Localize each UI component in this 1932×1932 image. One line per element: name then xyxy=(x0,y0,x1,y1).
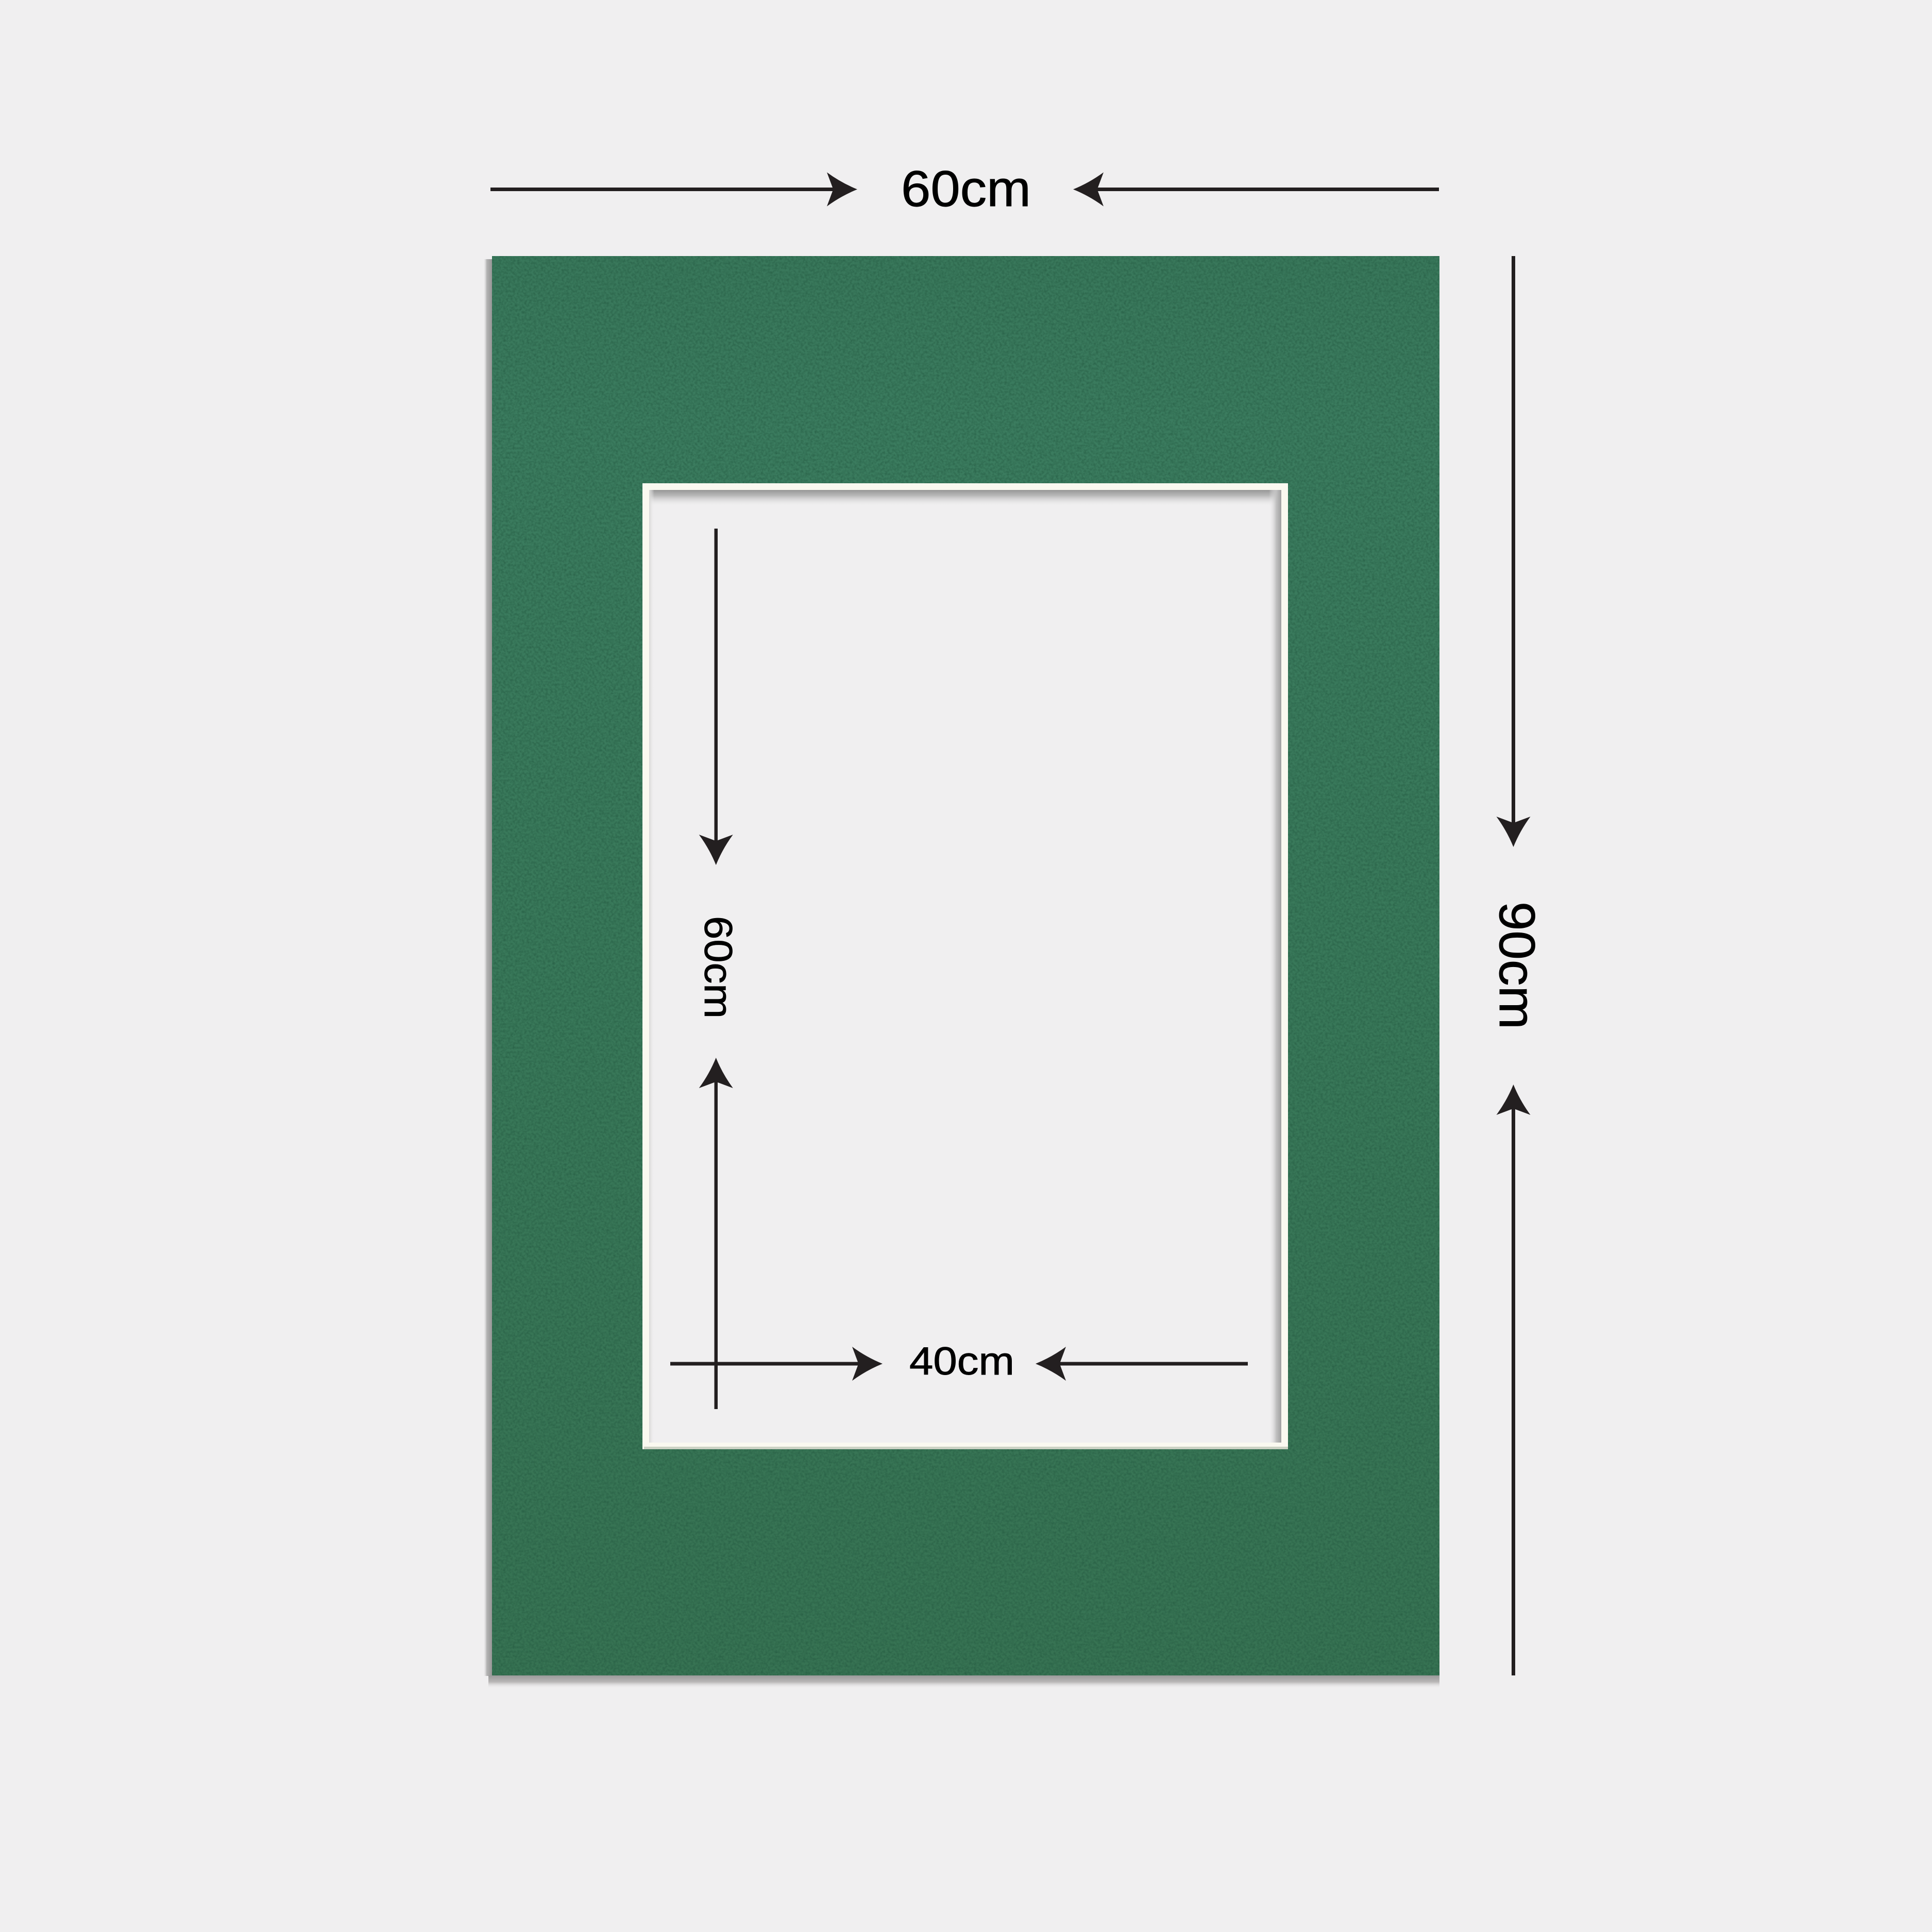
mat surface xyxy=(492,256,1439,1675)
panel: green mat board xyxy=(483,256,1439,1688)
arrow: outer height, top xyxy=(1496,256,1530,847)
inner shadow left xyxy=(649,490,654,1443)
inner shadow right xyxy=(1269,490,1281,1443)
window opening xyxy=(642,483,1288,1449)
text: window width label: 40cm xyxy=(909,1340,1014,1383)
bevel bottom edge xyxy=(644,1447,1288,1449)
heading: outer width label: 60cm xyxy=(901,160,1031,217)
text: window height label: 60cm xyxy=(696,916,740,1019)
cream bevel xyxy=(642,483,1288,1449)
opening interior xyxy=(649,490,1281,1443)
arrow: window width, left xyxy=(670,1347,883,1381)
arrow: window width, right xyxy=(1036,1347,1248,1381)
arrow: window height, top xyxy=(699,529,733,865)
arrow: outer width, left xyxy=(490,172,857,206)
mat shadow bottom xyxy=(488,1675,1439,1688)
mat paper grain xyxy=(492,256,1439,1675)
inner shadow top xyxy=(649,490,1281,506)
arrow: window height, bottom xyxy=(699,1058,733,1409)
arrow: outer width, right xyxy=(1073,172,1439,206)
arrow: outer height, bottom xyxy=(1496,1084,1530,1675)
mat shadow left xyxy=(483,259,492,1676)
heading: outer height label: 90cm xyxy=(1489,902,1546,1029)
